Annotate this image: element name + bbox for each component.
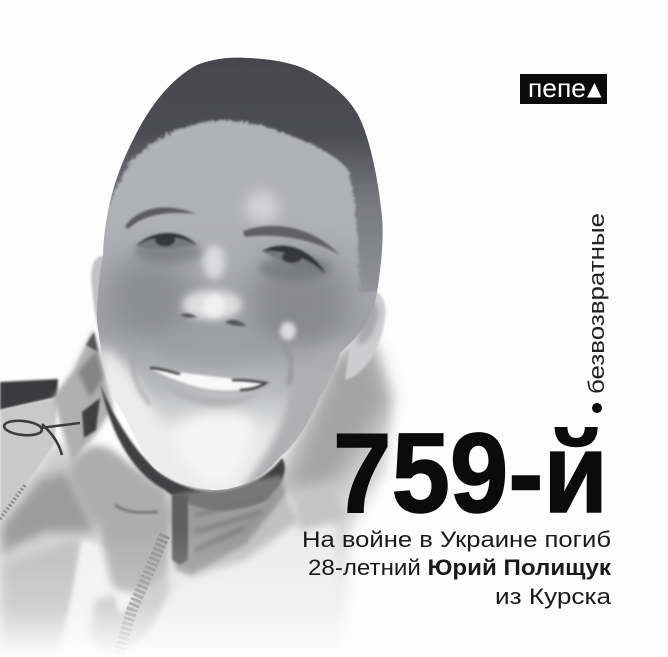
vertical section label: безвозвратные	[584, 213, 609, 394]
caption: 28-летний Юрий Полищук	[308, 555, 612, 580]
drawstring cord	[3, 419, 80, 455]
eye sockets	[134, 241, 202, 263]
right ear	[345, 289, 385, 380]
collar right fold	[182, 492, 300, 578]
bottom fade	[0, 530, 668, 657]
right eye	[262, 246, 326, 274]
left eye	[136, 233, 197, 249]
jaw left light	[100, 342, 161, 472]
white panel left	[0, 480, 50, 560]
highlights	[245, 191, 279, 223]
nose shade	[170, 343, 259, 366]
skin base	[90, 50, 390, 495]
dark strap	[0, 379, 58, 410]
mouth	[150, 368, 266, 390]
left ear	[91, 256, 112, 341]
cheek left shading	[108, 253, 192, 337]
portrait photo of Yuri	[0, 40, 392, 657]
jaw right shade	[240, 386, 324, 485]
shirt white patches	[100, 547, 135, 615]
caption	[302, 527, 612, 609]
smile creases	[133, 342, 150, 405]
jacket base	[0, 345, 392, 657]
zipper pull	[172, 495, 188, 565]
nostrils	[180, 314, 197, 318]
lighter lower right	[130, 495, 340, 657]
logo: пепе	[528, 73, 586, 103]
neck shadow	[100, 383, 285, 511]
logo	[520, 73, 607, 104]
caption: из Курска	[495, 584, 612, 609]
hair	[108, 58, 383, 292]
grey shadow right of jaw	[280, 345, 388, 492]
zip flap grey	[90, 530, 170, 657]
dark fold of jacket	[0, 470, 97, 560]
crumpled collar	[53, 330, 113, 462]
lower lip shade	[165, 386, 262, 406]
collar front	[70, 446, 172, 592]
zipper	[118, 535, 165, 657]
white strip beside sleeve	[60, 540, 125, 657]
collar grey under chin	[172, 475, 285, 575]
main number: 759-й	[333, 410, 608, 536]
left shoulder	[0, 398, 57, 522]
caption: На войне в Украине погиб	[302, 527, 611, 552]
eyebrows	[125, 208, 197, 229]
lower left sleeve	[0, 537, 83, 657]
cheek right shading	[252, 252, 348, 348]
grey under collar	[292, 482, 345, 530]
head and face	[90, 40, 390, 495]
